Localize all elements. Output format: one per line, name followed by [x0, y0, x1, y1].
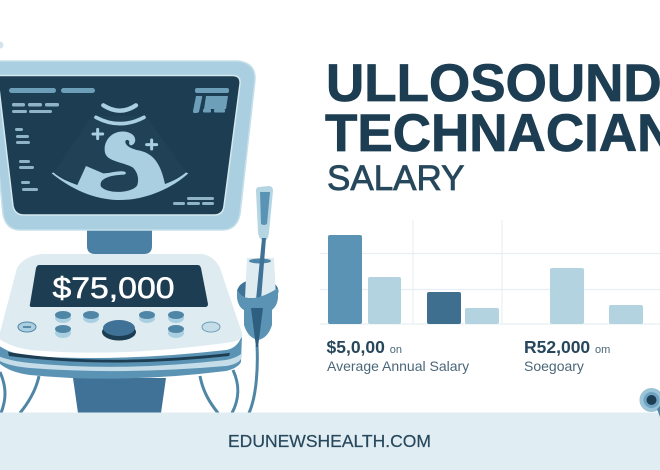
- scan sector: [54, 116, 186, 192]
- transducer probe and holder: [237, 186, 278, 413]
- monitor frame: [0, 61, 255, 230]
- bar 2: [368, 277, 401, 324]
- holder back ring: [238, 279, 278, 303]
- probe head: [256, 186, 273, 240]
- monitor screen: [0, 76, 240, 215]
- test tube: [245, 258, 276, 298]
- machine pedestal: [73, 378, 166, 413]
- footer band: [0, 412, 660, 470]
- stat: second salary: [524, 337, 610, 374]
- control console: [0, 254, 242, 379]
- console light strip: [0, 354, 241, 371]
- monitor neck: [87, 228, 152, 254]
- bar 6: [609, 305, 643, 324]
- icon: corner target: [640, 388, 660, 417]
- salary display: [30, 265, 208, 307]
- bar 5: [550, 268, 584, 324]
- console slot: [8, 352, 230, 362]
- holder cup: [237, 288, 278, 340]
- stat: second salary: Soegoary: [524, 358, 584, 374]
- title: [325, 54, 660, 198]
- bar 3: [427, 292, 461, 324]
- console buttons: [18, 311, 220, 340]
- probe shaft: [256, 238, 266, 300]
- console body: [0, 254, 242, 353]
- monitor: [0, 61, 255, 230]
- console lower trim: [0, 335, 242, 379]
- footer website: EDUNEWSHEALTH.COM: [228, 431, 431, 451]
- title line 1: ULLOSOUND: [326, 54, 660, 113]
- machine cables: [0, 370, 238, 413]
- icon: small corner dot: [0, 42, 4, 48]
- stat: second salary: R52,000 om: [524, 337, 610, 357]
- bar 1: [328, 235, 362, 324]
- ultrasound image: [52, 105, 188, 200]
- probe cable: [249, 345, 257, 413]
- panel: ultrasound machine: [0, 61, 278, 413]
- stat: average annual salary: $5,0,00 on: [326, 337, 402, 357]
- salary display: $75,000: [52, 272, 174, 305]
- subtitle: SALARY: [327, 159, 464, 198]
- bar chart: [320, 220, 660, 324]
- stat: average annual salary: [326, 337, 469, 374]
- stat: average annual salary: Average Annual Salary: [327, 358, 469, 374]
- screen readouts: [9, 88, 229, 113]
- bar 4: [465, 308, 499, 324]
